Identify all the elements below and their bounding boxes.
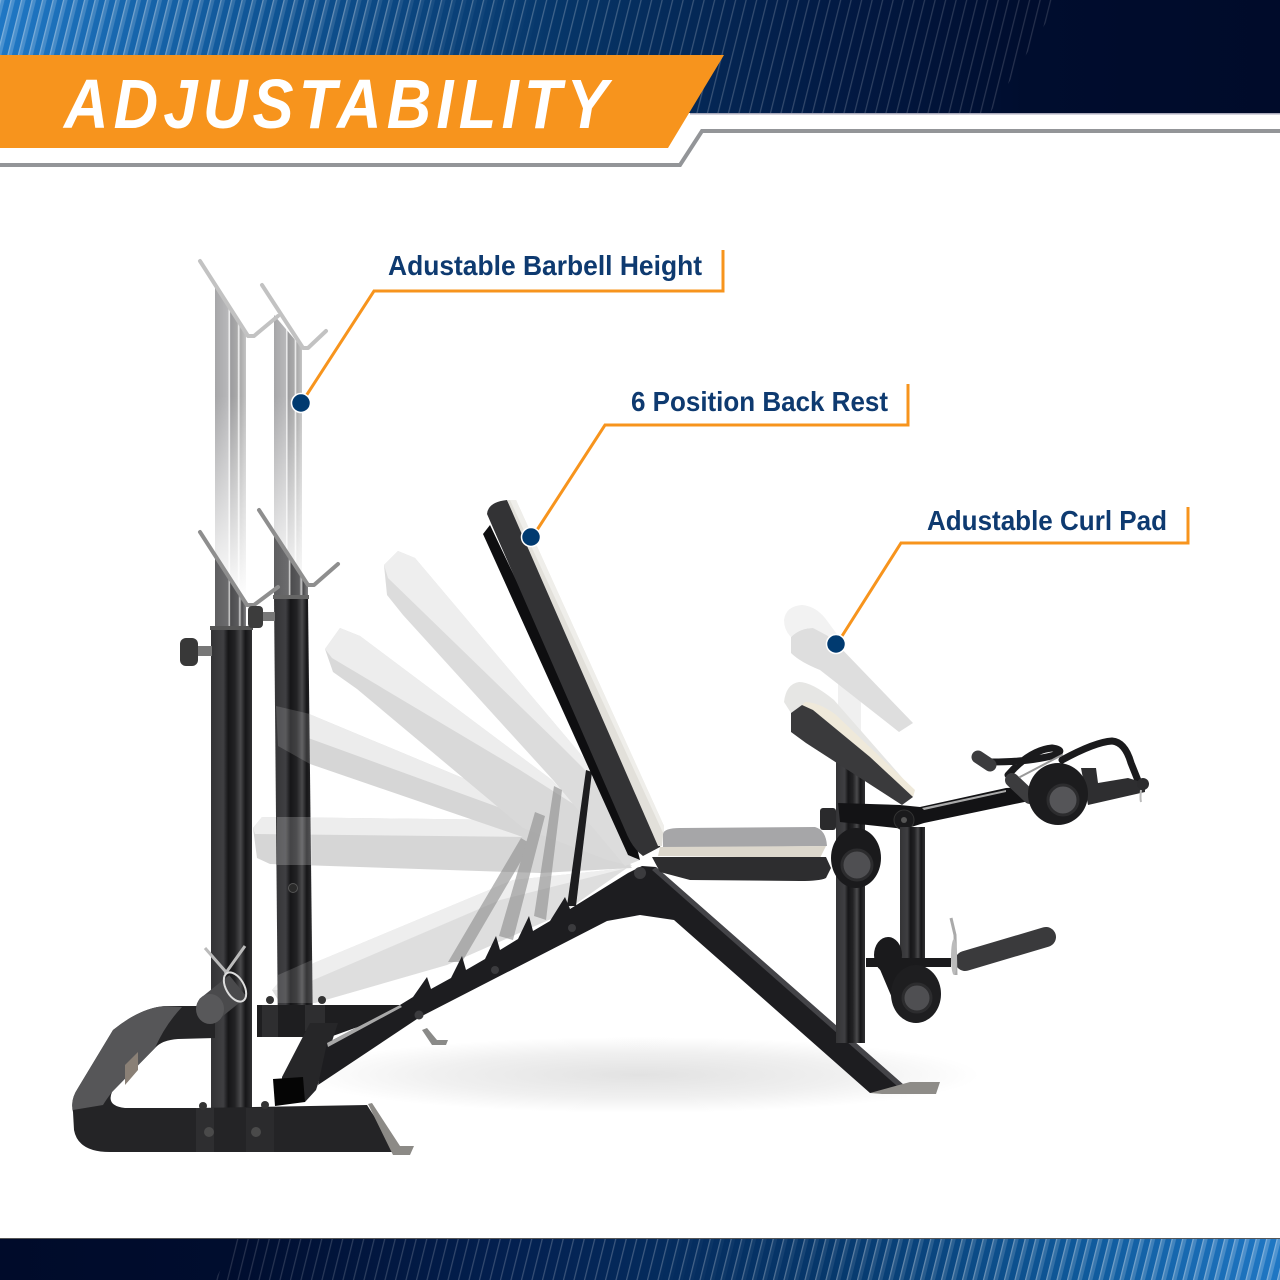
preacher curl pad ghost bbox=[784, 605, 913, 740]
rear upright post bbox=[273, 535, 313, 1037]
callout: curl pad bbox=[826, 505, 1188, 654]
ghost: position 3 bbox=[280, 706, 620, 868]
back rest ghost positions bbox=[253, 551, 640, 1003]
ghost struts bbox=[448, 786, 562, 962]
roller: upper bbox=[1028, 763, 1149, 825]
callout: back rest bbox=[522, 384, 908, 546]
orange title banner bbox=[0, 55, 724, 148]
floor shadow bbox=[300, 1037, 980, 1113]
front foot plate bbox=[870, 1082, 940, 1094]
ghost: position 2 bbox=[325, 628, 632, 866]
raised hooks ghost bbox=[200, 261, 326, 348]
preacher curl pad bbox=[784, 682, 915, 805]
roller: lower bbox=[874, 937, 941, 1023]
marker dot: barbell height bbox=[292, 394, 310, 412]
lower barbell hooks bbox=[200, 510, 338, 605]
leg lever loop bbox=[978, 741, 1139, 797]
toothed bench frame bbox=[318, 866, 913, 1093]
marker dot: back rest bbox=[522, 528, 540, 546]
callout: barbell height bbox=[292, 250, 723, 412]
barbell peg and spring clip bbox=[196, 946, 251, 1024]
height adjustment knobs bbox=[180, 606, 275, 666]
square adjustment tube bbox=[273, 1023, 338, 1106]
bench base U-frame bbox=[72, 1006, 397, 1152]
header band bbox=[0, 0, 1280, 114]
seat pad bbox=[652, 827, 831, 881]
marker dot: curl pad bbox=[826, 634, 846, 654]
base foot plate bbox=[368, 1103, 414, 1155]
header grey rule bbox=[0, 131, 1280, 165]
front vertical post bbox=[836, 760, 865, 1043]
title: ADJUSTABILITY bbox=[62, 64, 613, 143]
roller: seat bbox=[831, 828, 881, 888]
back rest pad bbox=[483, 500, 664, 860]
lever arm bbox=[820, 787, 1034, 830]
hanging arm bbox=[866, 827, 951, 967]
ghost: position 4 bbox=[253, 817, 632, 873]
callout label: back rest: 6 Position Back Rest bbox=[631, 386, 888, 417]
ghost: position 1 bbox=[384, 551, 640, 866]
footer band bbox=[0, 1238, 1280, 1280]
callout label: curl pad: Adustable Curl Pad bbox=[927, 505, 1167, 536]
front upright post bbox=[210, 555, 253, 1152]
rear base crossbar bbox=[257, 996, 405, 1037]
rear foot plate bbox=[422, 1028, 448, 1045]
real strut bbox=[567, 770, 592, 906]
raised barbell post ghost bbox=[215, 287, 302, 600]
callout label: barbell height: Adustable Barbell Height bbox=[388, 250, 702, 281]
loading peg bbox=[951, 918, 1046, 975]
ghost: position 5 bbox=[272, 868, 627, 1003]
